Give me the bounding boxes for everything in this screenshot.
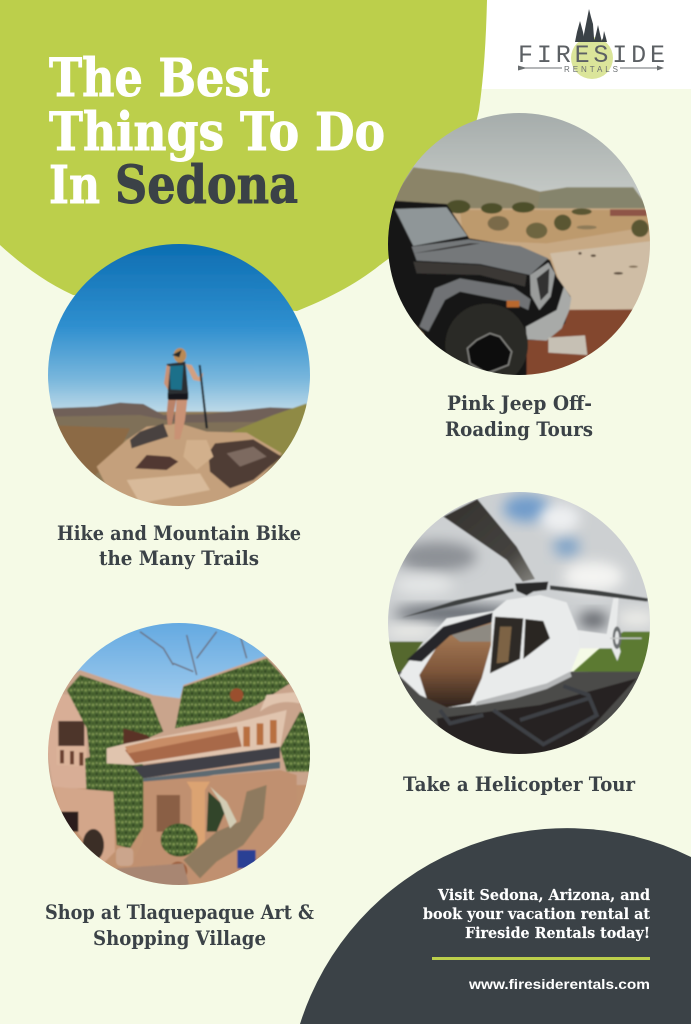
upper ivy [67, 675, 163, 758]
logo: rentals line with arrows: RENTALS [564, 65, 618, 74]
label: jeep: Roading Tours [445, 417, 593, 441]
photo: helicopter [388, 492, 650, 754]
under porch [142, 770, 297, 827]
website: www.firesiderentals.com [468, 976, 650, 992]
planter [161, 823, 198, 857]
lower wall [53, 787, 115, 863]
divider [432, 957, 650, 960]
label: jeep [445, 391, 593, 441]
logo: circle emblem [571, 37, 613, 79]
label: hike [57, 521, 301, 570]
skids [440, 686, 598, 744]
roof beam [133, 747, 280, 778]
rotor blades [443, 499, 535, 582]
eagle sculpture [183, 785, 267, 878]
cockpit [419, 616, 492, 708]
logo panel [470, 0, 691, 89]
call to action text: book your vacation rental at [423, 905, 650, 923]
green header shape [0, 0, 487, 311]
call to action panel [300, 828, 691, 1024]
call to action text: Fireside Rentals today! [465, 924, 650, 942]
label: hike: Hike and Mountain Bike [57, 521, 301, 545]
wheel [445, 304, 528, 375]
balcony [107, 710, 287, 765]
body [399, 595, 580, 708]
jeep body [380, 201, 571, 380]
logo: wordmark: FIRESIDE [518, 41, 665, 70]
title: In [49, 155, 100, 216]
label: helicopter: Take a Helicopter Tour [403, 772, 635, 796]
photo: hiker [48, 244, 310, 506]
call to action text [423, 886, 650, 942]
lower ivy [85, 748, 147, 848]
photo: shopping village [48, 623, 310, 885]
hiker figure [164, 348, 208, 439]
call to action text: Visit Sedona, Arizona, and [437, 886, 650, 904]
photo: jeep [388, 113, 650, 375]
label: hike: the Many Trails [99, 546, 259, 570]
tail [577, 597, 621, 661]
label: jeep: Pink Jeep Off- [447, 391, 592, 415]
title: The Best [49, 48, 270, 109]
label: shopping: Shopping Village [93, 926, 266, 950]
walls [40, 656, 320, 788]
logo: rentals line with arrows [518, 65, 664, 74]
rocks [97, 423, 282, 512]
title: Sedona [115, 155, 298, 216]
logo: pine trees [575, 9, 607, 42]
title [49, 48, 385, 216]
label: shopping [45, 900, 314, 950]
label: shopping: Shop at Tlaquepaque Art & [45, 900, 314, 924]
title: Things To Do [49, 102, 385, 163]
